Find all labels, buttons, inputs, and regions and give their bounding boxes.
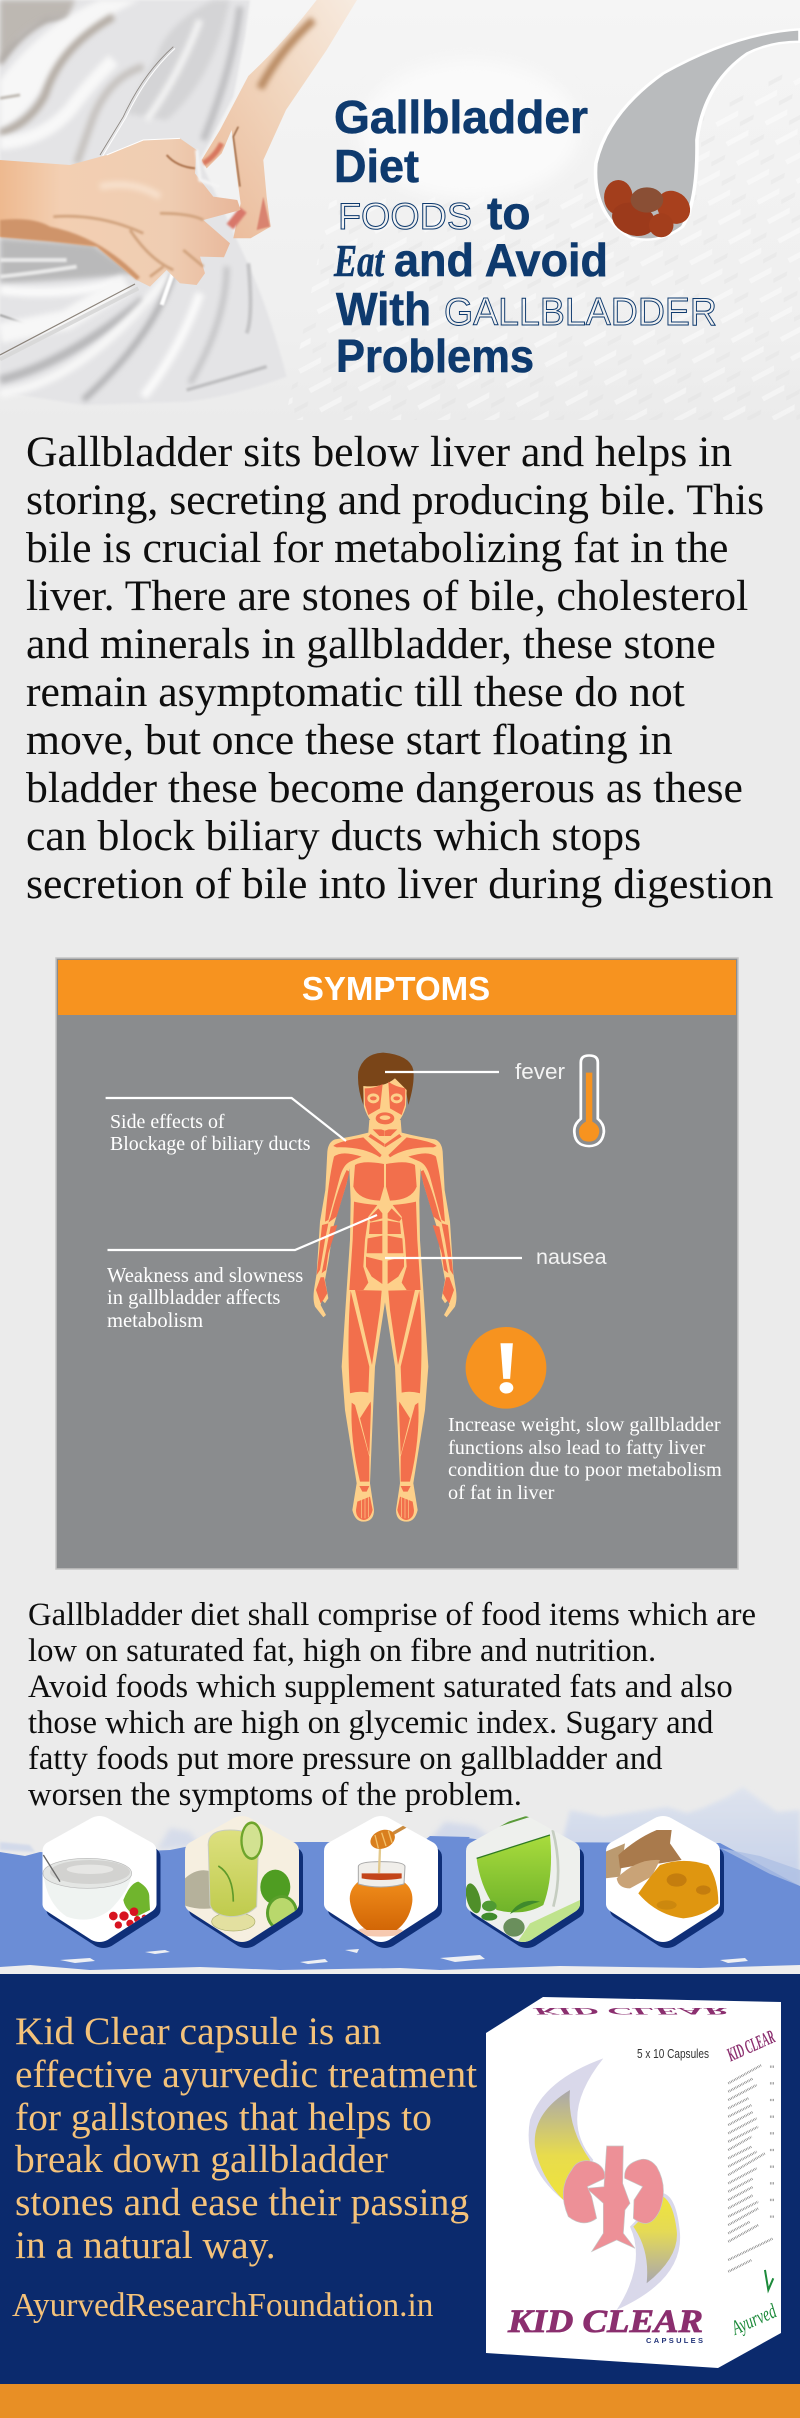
intro paragraph: storing, secreting and producing bile. This — [26, 476, 764, 524]
promo text: in a natural way. — [15, 2223, 276, 2267]
footer stripe — [0, 2384, 800, 2418]
label: blockage side effects: Blockage of biliary ducts — [110, 1133, 311, 1155]
label: increase weight: Increase weight, slow gallbladder — [448, 1414, 721, 1436]
diet paragraph: Gallbladder diet shall comprise of food items which are — [28, 1597, 756, 1633]
symptoms heading: SYMPTOMS — [302, 970, 490, 1007]
icon: warning exclamation — [466, 1327, 546, 1409]
rear arm and hand — [202, 0, 357, 238]
promo text: Kid Clear capsule is an — [15, 2009, 382, 2053]
title: Eat — [333, 235, 385, 286]
promo text: for gallstones that helps to — [15, 2095, 432, 2139]
title: FOODS — [338, 196, 472, 237]
body left half — [314, 1120, 385, 1522]
food: lime drink — [183, 1816, 303, 1948]
diet paragraph: those which are high on glycemic index. Sugary and — [28, 1705, 713, 1741]
blue brush band — [0, 1787, 800, 1975]
label: blockage side effects — [110, 1111, 311, 1155]
body right half — [385, 1120, 456, 1522]
box side label: Ayurved — [727, 2300, 780, 2340]
front hand — [0, 138, 241, 287]
label: blockage side effects: Side effects of — [110, 1111, 225, 1133]
kidney logo — [529, 2058, 680, 2310]
label: weakness — [107, 1265, 303, 1332]
box side label — [724, 2027, 780, 2340]
header banner — [0, 0, 800, 420]
intro paragraph: bile is crucial for metabolizing fat in the — [26, 524, 728, 572]
product box — [486, 1997, 781, 2368]
box top label: KID CLEAR — [531, 2006, 728, 2017]
promo text: break down gallbladder — [15, 2137, 388, 2181]
bile stones — [604, 180, 694, 241]
intro paragraph — [26, 428, 774, 908]
label: increase weight: of fat in liver — [448, 1482, 555, 1504]
title: With — [336, 283, 431, 335]
promo text — [15, 2009, 477, 2267]
intro paragraph: remain asymptomatic till these do not — [26, 668, 685, 716]
label: increase weight: functions also lead to fatty liver — [448, 1437, 706, 1459]
panel: product promo — [0, 1974, 800, 2418]
food hexagons — [42, 1815, 724, 1948]
food: coconut water glass — [42, 1816, 160, 1948]
diet paragraph: Avoid foods which supplement saturated fats and also — [28, 1669, 733, 1705]
label: increase weight: condition due to poor metabolism — [448, 1459, 722, 1481]
box capsules label: CAPSULES — [646, 2336, 703, 2345]
intro paragraph: Gallbladder sits below liver and helps in — [26, 428, 732, 476]
title: to — [487, 187, 530, 239]
box capacity: 5 x 10 Capsules — [637, 2047, 709, 2061]
title: and Avoid — [394, 234, 608, 286]
head — [358, 1053, 414, 1131]
gallbladder illustration — [596, 29, 800, 241]
website: AyurvedResearchFoundation.in — [12, 2287, 434, 2324]
diet paragraph — [28, 1597, 756, 1813]
food: honey jar — [324, 1816, 442, 1948]
title: GALLBLADDER — [444, 291, 717, 334]
label: weakness: Weakness and slowness — [107, 1265, 303, 1287]
icon: thermometer — [574, 1056, 604, 1146]
promo text: stones and ease their passing — [15, 2180, 469, 2224]
intro paragraph: bladder these become dangerous as these — [26, 764, 743, 812]
intro paragraph: liver. There are stones of bile, cholesterol — [26, 572, 748, 620]
food: turmeric — [606, 1816, 724, 1948]
label: nausea: nausea — [536, 1245, 607, 1269]
title — [333, 91, 717, 382]
symptoms header bar — [58, 960, 736, 1015]
box brand name: KID CLEAR — [507, 2304, 703, 2340]
title: Diet — [334, 140, 419, 192]
title: Gallbladder — [334, 91, 588, 143]
diet paragraph: fatty foods put more pressure on gallbladder and — [28, 1741, 663, 1777]
panel: symptoms — [56, 958, 738, 1569]
photo: hands gripping shirt — [0, 0, 357, 405]
promo text: effective ayurvedic treatment — [15, 2052, 477, 2096]
intro paragraph: secretion of bile into liver during digestion — [26, 860, 774, 908]
intro paragraph: can block biliary ducts which stops — [26, 812, 641, 860]
intro paragraph: move, but once these start floating in — [26, 716, 673, 764]
label: increase weight — [448, 1414, 722, 1504]
label: weakness: metabolism — [107, 1310, 203, 1332]
label: fever: fever — [515, 1059, 566, 1084]
food: green tea — [463, 1815, 584, 1948]
label: weakness: in gallbladder affects — [107, 1287, 280, 1309]
title: Problems — [336, 330, 534, 382]
callout lines — [106, 1072, 522, 1258]
diet paragraph: worsen the symptoms of the problem. — [28, 1777, 522, 1813]
intro paragraph: and minerals in gallbladder, these stone — [26, 620, 716, 668]
human body muscle figure — [314, 1053, 456, 1522]
diet paragraph: low on saturated fat, high on fibre and nutrition. — [28, 1633, 656, 1669]
